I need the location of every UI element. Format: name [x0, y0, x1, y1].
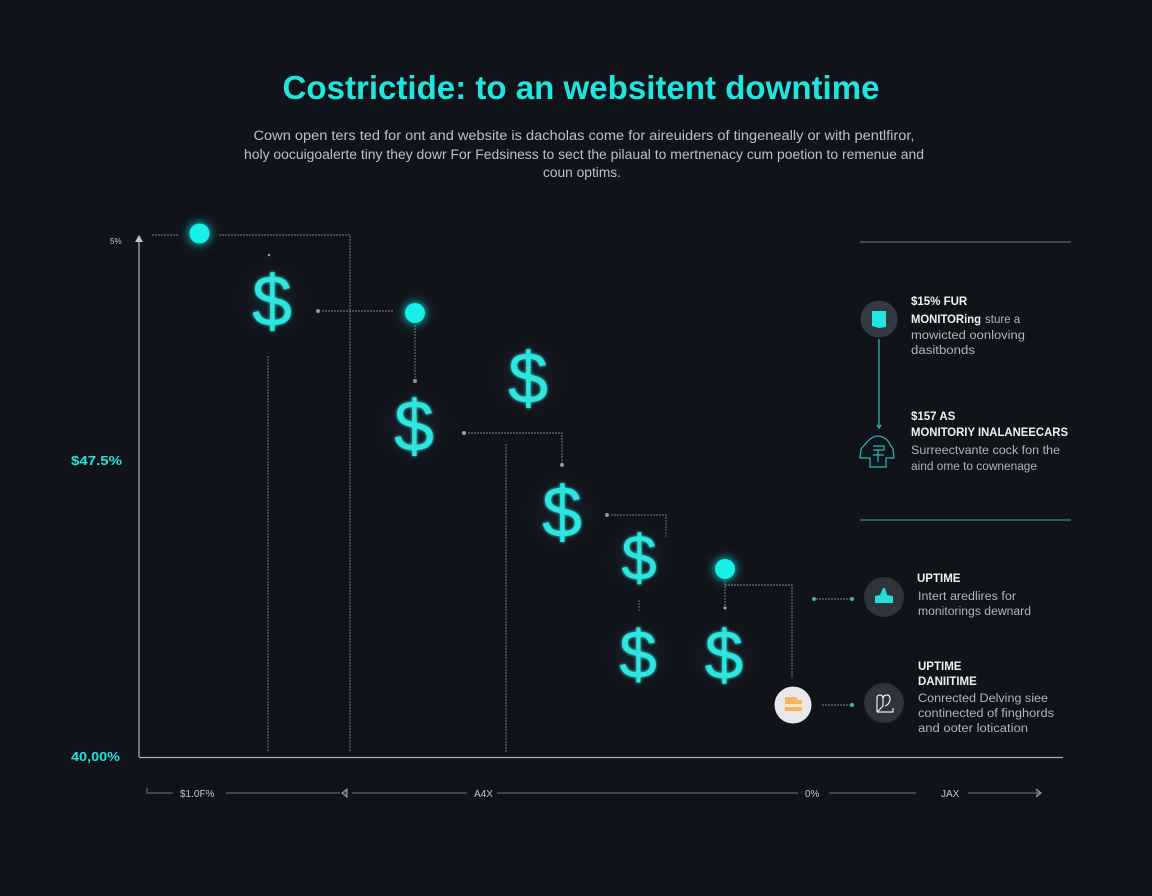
bottom axis: 0% [805, 789, 820, 800]
dollar icons: $ [394, 387, 434, 467]
dollar icons: $ [619, 617, 657, 693]
intro text [244, 128, 924, 180]
divider lines [860, 242, 1071, 520]
text: uptime: monitorings dewnard [918, 606, 1031, 618]
panel: monitoring [860, 296, 1068, 473]
text: uptime danitime [918, 661, 1054, 735]
bottom axis: A4X [474, 789, 493, 800]
connector: uptime [812, 597, 854, 601]
dollar icons: $ [542, 473, 582, 553]
text: uptime: UPTIME [917, 573, 961, 585]
icon: uptime chart [864, 577, 904, 617]
y axis labels: $47.5% [71, 453, 123, 468]
dollar icons: $ [621, 522, 657, 594]
connector: badge to icon [822, 703, 854, 707]
panel: uptime downtime [774, 661, 1054, 735]
text: monitoring one: mowicted oonloving [911, 330, 1025, 342]
title: Costrictide: to an websitent downtime [282, 69, 880, 106]
dollar icons: $ [252, 262, 292, 342]
y axis labels: 40,00% [71, 749, 120, 764]
icon: shirt [860, 436, 894, 467]
bottom axis: $1.0F% [180, 789, 215, 800]
text: monitoring two [911, 411, 1068, 473]
bottom axis [147, 788, 1041, 800]
text: uptime danitime: continected of finghords [918, 708, 1054, 720]
text: monitoring one [911, 296, 1025, 357]
text: uptime danitime: Conrected Delving siee [918, 693, 1048, 705]
intro text: coun optims. [543, 165, 621, 180]
text: monitoring two: MONITORIY INALANEECARS [911, 427, 1068, 439]
text: monitoring one: $15% FUR [911, 296, 968, 308]
text: monitoring two: Surreectvante cock fon the [911, 445, 1060, 457]
y axis labels [71, 237, 123, 764]
glowing markers [190, 224, 735, 579]
icon: monitor glyph [864, 683, 904, 723]
text: uptime danitime: and ooter lotication [918, 723, 1028, 735]
bottom axis: JAX [941, 789, 960, 800]
dollar icons: $ [508, 339, 548, 419]
icon: monitoring square [860, 300, 898, 338]
dollar icons [217, 246, 774, 705]
dollar icons: $ [705, 616, 743, 694]
intro text: Cown open ters ted for ont and website is dacholas come for aireuiders of tingeneally or with pentlfiror, [254, 128, 914, 143]
panel: uptime [812, 573, 1031, 618]
text: uptime danitime: DANIITIME [918, 676, 977, 688]
text: monitoring one: sture a [985, 314, 1021, 326]
text: monitoring two: aind ome to cownenage [911, 461, 1037, 473]
arrow: monitoring to shirt [877, 339, 881, 428]
vertical and elbow connectors [152, 235, 792, 752]
text: monitoring two: $157 AS [911, 411, 956, 423]
chart axes [135, 235, 1063, 758]
intro text: holy oocuigoalerte tiny they dowr For Fedsiness to sect the pilaual to mertnenacy cum poetion to remenue and [244, 147, 924, 162]
text: monitoring one: MONITORing [911, 314, 981, 326]
text: uptime [917, 573, 1031, 618]
text: uptime: Intert aredlires for [918, 591, 1016, 603]
text: monitoring one: dasitbonds [911, 345, 975, 357]
text: uptime danitime: UPTIME [918, 661, 962, 673]
icon: folder badge [774, 686, 812, 724]
y axis labels: 5% [110, 237, 122, 246]
